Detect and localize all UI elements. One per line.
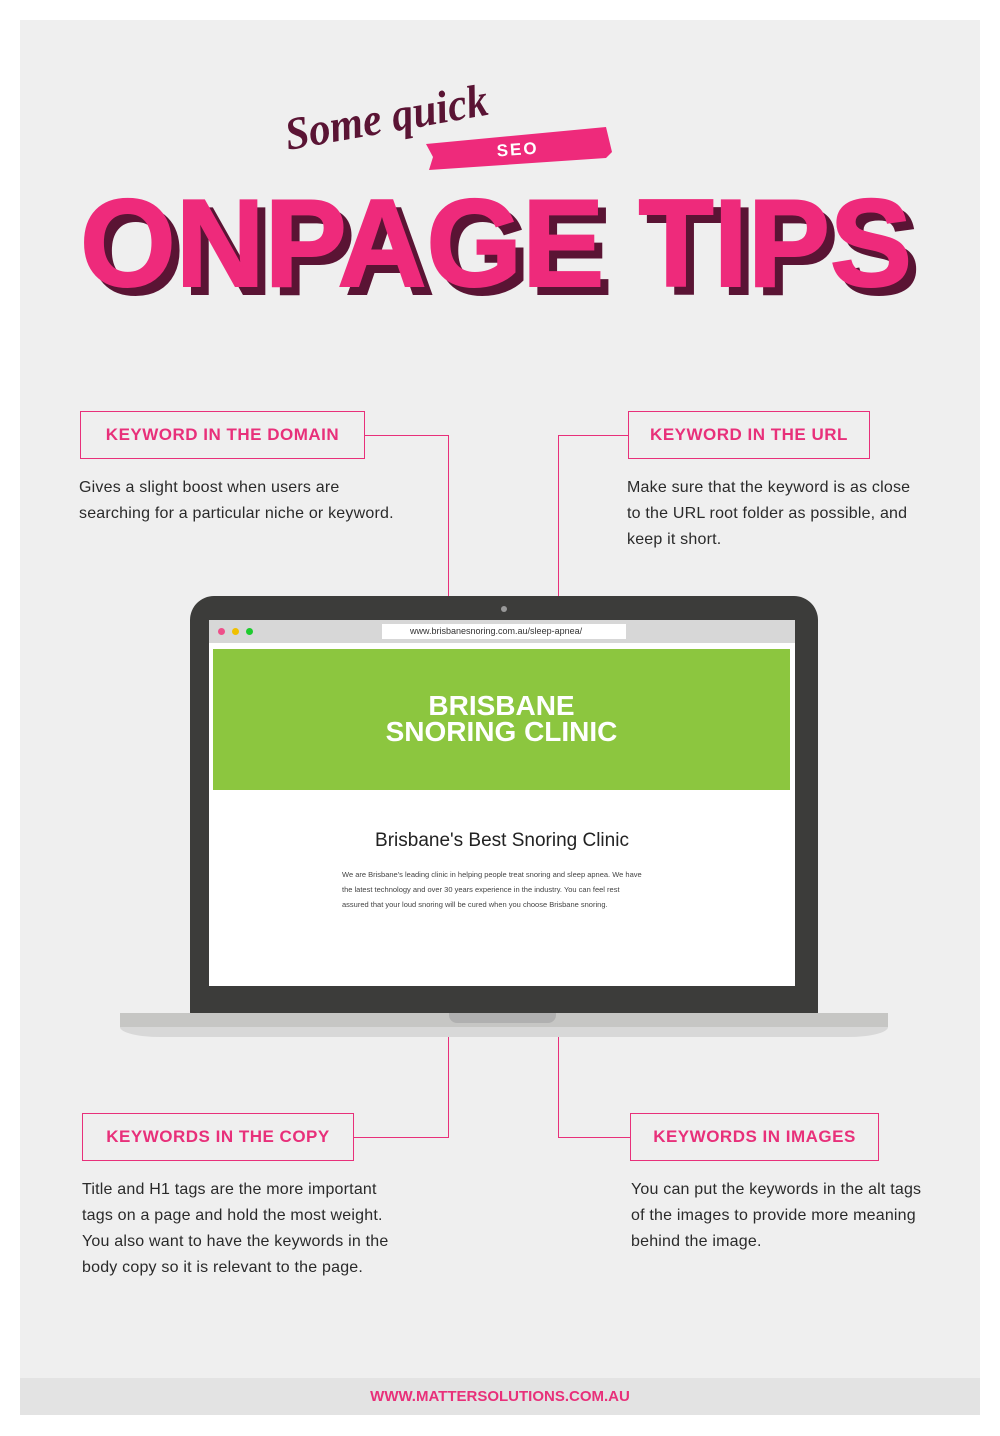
- tip: domain: [79, 411, 394, 522]
- heading: [630, 1113, 879, 1161]
- connector lines: [365, 435, 449, 436]
- page body: the latest technology and over 30 years experience in the industry. You can feel rest: [342, 885, 620, 894]
- heading: [80, 411, 365, 459]
- tip: images: [630, 1113, 921, 1250]
- green header: BRISBANE: [428, 690, 575, 721]
- laptop: [120, 596, 888, 1037]
- text: searching for a particular niche or keyword.: [79, 505, 394, 522]
- url field: www.brisbanesnoring.com.au/sleep-apnea/: [410, 626, 582, 636]
- text: You also want to have the keywords in the: [82, 1233, 388, 1250]
- page body: [342, 870, 642, 909]
- text: behind the image.: [631, 1233, 762, 1250]
- text: Title and H1 tags are the more important: [82, 1181, 377, 1198]
- page body: assured that your loud snoring will be cured when you choose Brisbane snoring.: [342, 900, 608, 909]
- camera: [501, 606, 507, 612]
- page content: [209, 643, 795, 986]
- page body: We are Brisbane's leading clinic in helping people treat snoring and sleep apnea. We have: [342, 870, 642, 879]
- main heading: ONPAGE TIPS: [80, 175, 912, 310]
- SEO ribbon: SEO: [496, 139, 539, 160]
- text: tags on a page and hold the most weight.: [82, 1207, 383, 1224]
- heading: [82, 1113, 354, 1161]
- text: [631, 1181, 921, 1250]
- text: body copy so it is relevant to the page.: [82, 1259, 363, 1276]
- text: [79, 479, 394, 522]
- text: of the images to provide more meaning: [631, 1207, 916, 1224]
- green header: SNORING CLINIC: [386, 716, 617, 747]
- SEO ribbon: [426, 127, 612, 170]
- heading: KEYWORDS IN IMAGES: [653, 1127, 856, 1146]
- text: Make sure that the keyword is as close: [627, 479, 910, 496]
- heading: [628, 411, 870, 459]
- text: [627, 479, 910, 548]
- text: to the URL root folder as possible, and: [627, 505, 907, 522]
- tip: url: [627, 411, 910, 548]
- footer: WWW.MATTERSOLUTIONS.COM.AU: [370, 1388, 630, 1405]
- title: [80, 80, 920, 310]
- screen bezel: [190, 596, 818, 1026]
- text: [82, 1181, 388, 1276]
- browser bar: [209, 620, 795, 643]
- base: [120, 1013, 888, 1027]
- green header: [213, 649, 790, 790]
- heading: KEYWORD IN THE DOMAIN: [106, 425, 339, 444]
- heading: KEYWORDS IN THE COPY: [106, 1127, 330, 1146]
- heading: KEYWORD IN THE URL: [650, 425, 848, 444]
- text: keep it short.: [627, 531, 721, 548]
- text: You can put the keywords in the alt tags: [631, 1181, 921, 1198]
- tip: copy: [82, 1113, 388, 1276]
- text: Gives a slight boost when users are: [79, 479, 339, 496]
- footer: [20, 1378, 980, 1415]
- url field: [382, 624, 626, 639]
- page heading: Brisbane's Best Snoring Clinic: [375, 830, 629, 851]
